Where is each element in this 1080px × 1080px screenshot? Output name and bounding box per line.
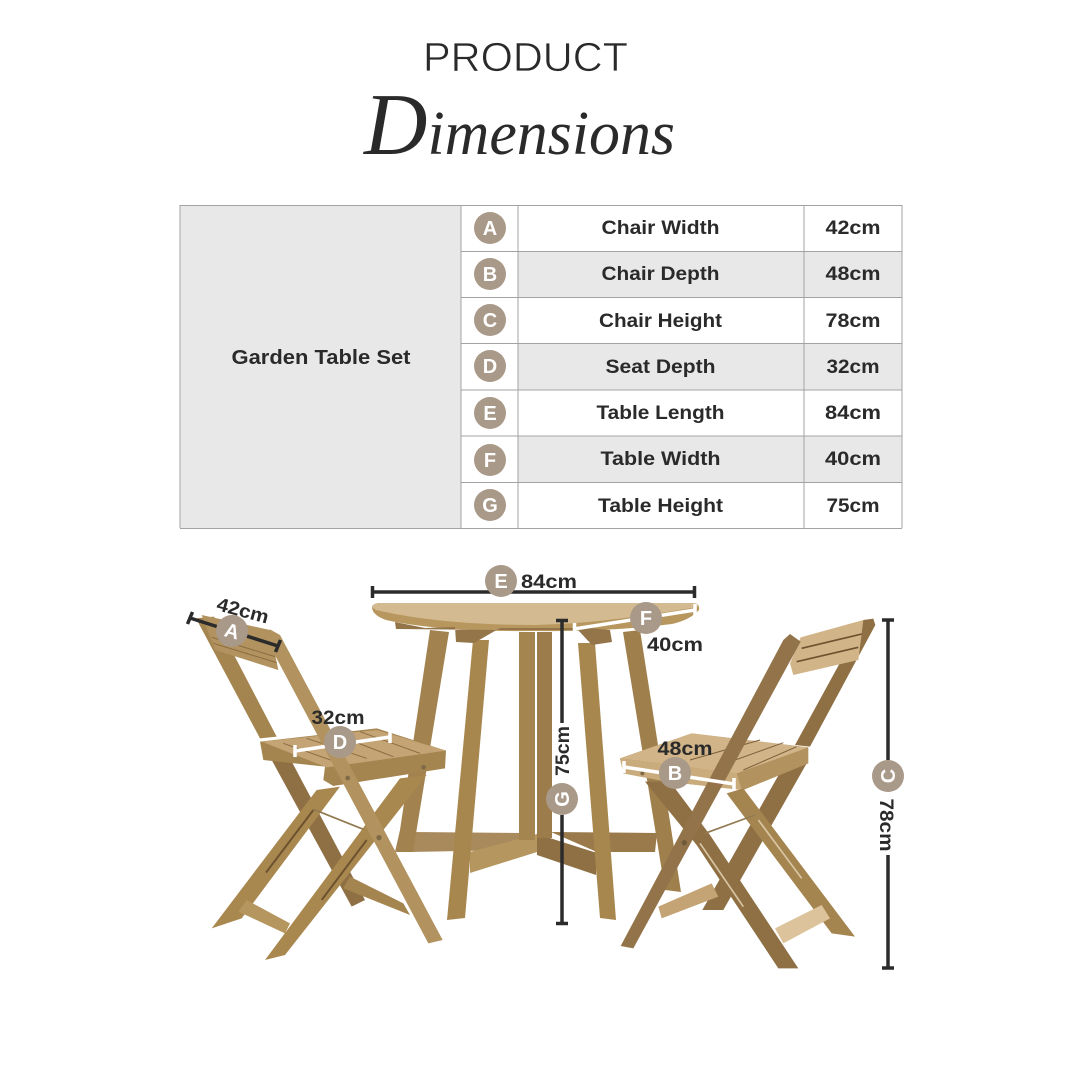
seat: [260, 728, 446, 786]
table centre posts: [519, 632, 535, 840]
row E: Table Length: [596, 403, 724, 424]
row E: [474, 397, 881, 429]
dimension A: chair width: [188, 594, 280, 652]
dimension B: chair depth: [624, 739, 734, 790]
row E: 84cm: [825, 403, 881, 424]
illustration: garden table: [372, 603, 699, 920]
dimension F: table width: F: [640, 608, 652, 630]
row B: B: [483, 264, 497, 286]
row B: 48cm: [826, 264, 880, 285]
row B: [474, 258, 880, 290]
title line: Dimensions: Dimensions: [363, 77, 675, 174]
row G: Table Height: [598, 496, 724, 517]
front legs and foot bars: [343, 877, 410, 915]
row C: Chair Height: [599, 311, 723, 332]
dimension F: table width: 40cm: [647, 635, 703, 656]
row A: [474, 212, 880, 244]
table lower braces: [410, 832, 522, 852]
dimension C: chair height: C: [878, 769, 900, 783]
row E: E: [483, 403, 497, 425]
dimension C: chair height: [872, 619, 904, 968]
table legs: [395, 630, 449, 852]
illustration: right chair: [620, 619, 875, 968]
rear post and leg: [196, 617, 277, 738]
row F: [474, 444, 881, 476]
row D: [474, 350, 880, 382]
front long post: [621, 634, 801, 948]
row C: 78cm: [826, 311, 880, 332]
dimensions table: [180, 205, 902, 528]
row G: G: [482, 495, 498, 517]
table top: [372, 603, 699, 631]
dimension G: table height: [546, 620, 578, 924]
row F: 40cm: [825, 449, 881, 470]
dimension E: table length: 84cm: [521, 572, 577, 593]
row A: 42cm: [826, 218, 880, 239]
row B: Chair Depth: [602, 264, 720, 285]
product name cell: Garden Table Set: [232, 347, 411, 369]
back slats: [790, 620, 863, 675]
dimension E: table length: [372, 565, 695, 598]
dimension D: seat depth: [295, 708, 390, 758]
row C: C: [483, 310, 497, 332]
row F: F: [484, 450, 496, 472]
front long post: [265, 629, 443, 943]
dimension A: chair width: A: [222, 619, 242, 644]
row F: Table Width: [600, 449, 720, 470]
back slats: [202, 615, 278, 670]
row D: 32cm: [826, 357, 880, 378]
row A: A: [483, 218, 497, 240]
rear post and leg: [795, 619, 875, 747]
long rear legs: [727, 788, 855, 937]
table row fills: [180, 205, 902, 528]
dimension F: table width: [574, 602, 703, 656]
title line: PRODUCT: PRODUCT: [423, 34, 628, 80]
row D: Seat Depth: [606, 357, 716, 378]
dimension G: table height: 75cm: [553, 726, 574, 776]
row C: [474, 304, 880, 336]
dimension D: seat depth: 32cm: [312, 708, 364, 729]
dimension D: seat depth: D: [333, 732, 347, 754]
row D: D: [483, 356, 497, 378]
illustration: left chair: [196, 615, 446, 960]
rear foot bar: [658, 883, 718, 918]
title: [363, 34, 675, 174]
dimension G: table height: G: [552, 791, 574, 807]
row G: 75cm: [826, 496, 880, 517]
dimension C: chair height: 78cm: [875, 798, 896, 852]
row A: Chair Width: [602, 218, 720, 239]
dimension B: chair depth: 48cm: [658, 739, 712, 760]
dimension B: chair depth: B: [668, 763, 682, 785]
seat: [620, 733, 808, 790]
dimension A: chair width: 42cm: [214, 594, 271, 628]
row G: [474, 489, 880, 521]
dimension E: table length: E: [494, 571, 508, 593]
